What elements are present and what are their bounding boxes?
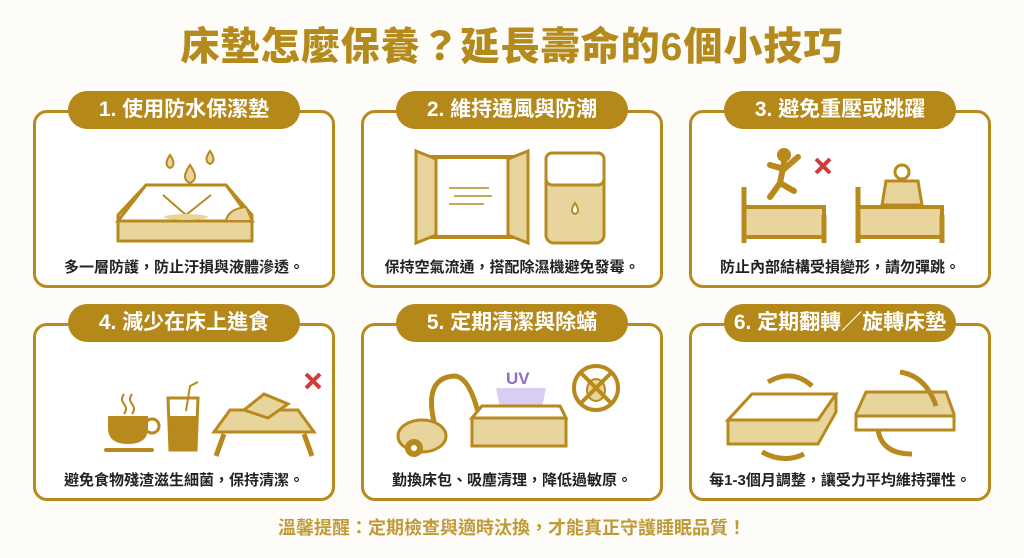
pill heading 5: 5. 定期清潔與除蟎 xyxy=(427,311,597,334)
caption 2: 保持空氣流通，搭配除濕機避免發霉。 xyxy=(384,259,640,276)
pill heading 3: 3. 避免重壓或跳躍 xyxy=(755,98,925,121)
pill heading 2: 2. 維持通風與防潮 xyxy=(427,98,597,121)
icon: vacuum, UV mattress, no-mite xyxy=(396,364,620,457)
icon: vacuum, UV mattress, no-mite: UV xyxy=(506,369,530,388)
panel: 3 avoid jumping xyxy=(689,110,991,288)
pill heading 3 xyxy=(724,91,956,129)
icon: mattresses with rotate arrows xyxy=(724,370,956,462)
icon: person jumping and weight on bed xyxy=(742,148,944,243)
pill heading 1 xyxy=(68,91,300,129)
caption 3: 防止內部結構受損變形，請勿彈跳。 xyxy=(720,259,960,276)
icon: coffee, drink, sandwich table xyxy=(104,372,322,457)
caption 1: 多一層防護，防止汙損與液體滲透。 xyxy=(64,259,304,276)
pill heading 5 xyxy=(396,304,628,342)
panel: 5 cleaning and mites xyxy=(361,323,663,501)
pill heading 4 xyxy=(68,304,300,342)
pill heading 2 xyxy=(396,91,628,129)
pill heading 4: 4. 減少在床上進食 xyxy=(99,311,269,334)
panel: 2 ventilation xyxy=(361,110,663,288)
footer tip: 溫馨提醒：定期檢查與適時汰換，才能真正守護睡眠品質！ xyxy=(278,518,746,538)
pill heading 6: 6. 定期翻轉／旋轉床墊 xyxy=(734,311,946,334)
panel: 1 waterproof protector xyxy=(33,110,335,288)
pill heading 6 xyxy=(724,304,956,342)
icon: mattress with water drops xyxy=(115,149,255,242)
caption 4: 避免食物殘渣滋生細菌，保持清潔。 xyxy=(64,472,304,489)
caption 5: 勤換床包、吸塵清理，降低過敏原。 xyxy=(392,472,632,489)
title: 床墊怎麼保養？延長壽命的6個小技巧 xyxy=(181,26,843,69)
panel: 4 no eating on bed xyxy=(33,323,335,501)
caption 6: 每1-3個月調整，讓受力平均維持彈性。 xyxy=(709,472,971,489)
pill heading 1: 1. 使用防水保潔墊 xyxy=(99,98,269,121)
icon: window and dehumidifier xyxy=(414,148,606,246)
panel: 6 rotate mattress xyxy=(689,323,991,501)
